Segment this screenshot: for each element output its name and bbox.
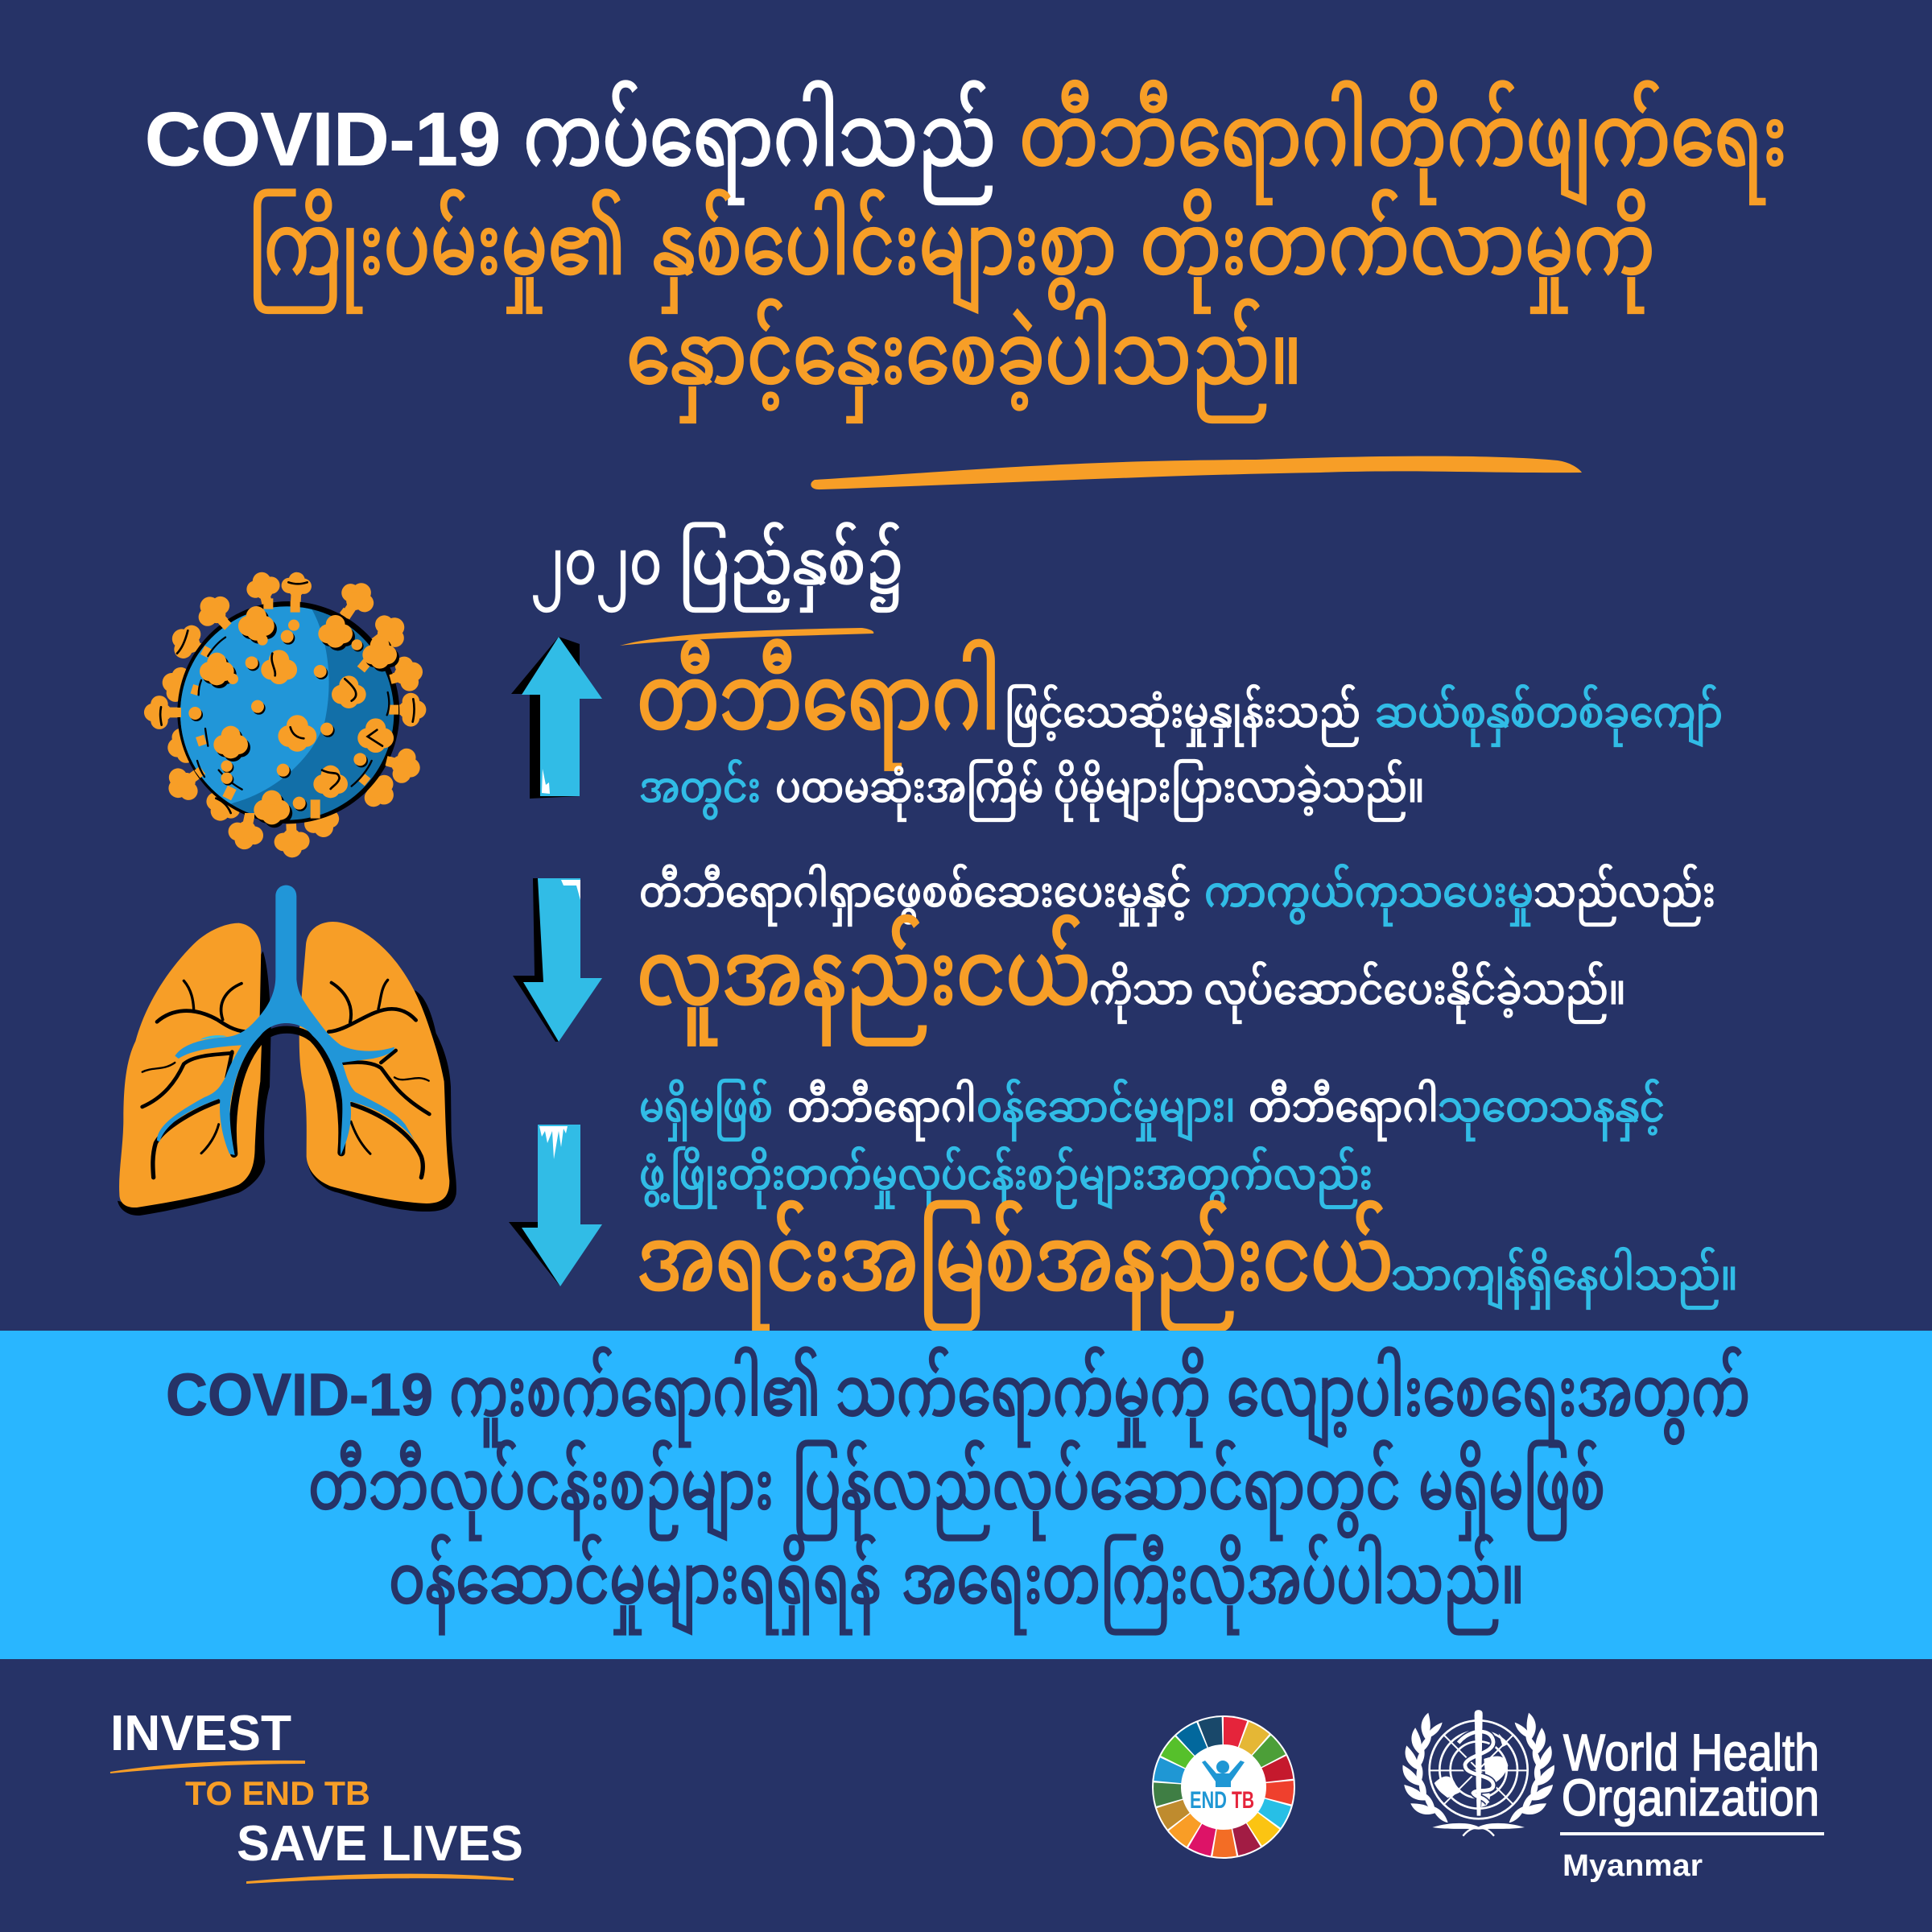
text block: few reached: တီဘီရောဂါရှာဖွေစစ်ဆေးပေးမှုနှင့် xyxy=(639,851,1191,943)
panel: call to action band: အရေးတကြီးလိုအပ်ပါသည်။ xyxy=(902,1514,1525,1662)
subheading: in 2020: ၂၀၂၀ xyxy=(531,503,662,637)
title: ကပ်ရောဂါသည် xyxy=(523,55,996,237)
panel: call to action band: COVID-19 xyxy=(166,1361,433,1428)
panel: call to action band: တီဘီလုပ်ငန်းစဉ်များ xyxy=(308,1420,774,1567)
logo: invest to end TB save lives: TO END TB xyxy=(185,1774,370,1812)
title: COVID-19 xyxy=(145,97,501,181)
title: တိုးတက်လာမှုကို xyxy=(1140,163,1655,346)
panel: call to action band: သက်ရောက်မှုကို xyxy=(836,1327,1211,1474)
text block: deaths rise: ဆယ်စုနှစ်တစ်ခုကျော် xyxy=(1375,671,1723,763)
text block: few resources: တီဘီရောဂါ xyxy=(1249,1066,1439,1158)
text block: few resources: သုတေသနနှင့် xyxy=(1438,1066,1665,1158)
arrow: down (resources) xyxy=(509,1125,602,1286)
subheading: in 2020 xyxy=(531,503,903,637)
logo text: World Health Organization Myanmar: Organization xyxy=(1562,1769,1819,1827)
panel: call to action band: ကူးစက်ရောဂါ၏ xyxy=(449,1327,821,1474)
text block: few resources: ဝန်ဆောင်မှုများ၊ xyxy=(976,1066,1236,1158)
arrow: up xyxy=(511,637,602,799)
text block: deaths rise xyxy=(637,611,1723,838)
panel: call to action band: ဝန်ဆောင်မှုများရရှိရန် xyxy=(389,1514,881,1662)
text block: few reached: သည်လည်း xyxy=(1534,851,1715,943)
arrow: down (diagnosis and treatment) xyxy=(513,878,602,1042)
title xyxy=(145,55,1787,456)
logo: End TB SDG wheel: END xyxy=(1190,1787,1227,1814)
logo: invest to end TB save lives: INVEST xyxy=(110,1706,291,1761)
icon: lungs xyxy=(118,886,456,1216)
text block: deaths rise: တီဘီရောဂါ xyxy=(637,611,1001,805)
subheading underline swoosh xyxy=(620,628,873,646)
panel: call to action band xyxy=(0,1327,1932,1662)
text block: deaths rise: ဖြင့်သေဆုံးမှုနှုန်းသည် xyxy=(1005,671,1360,763)
text block: few resources: သာကျန်ရှိနေပါသည်။ xyxy=(1391,1234,1738,1326)
title: နှောင့်နှေးစေခဲ့ပါသည်။ xyxy=(626,273,1302,456)
text block: few reached xyxy=(637,851,1715,1080)
title underline swoosh xyxy=(811,456,1582,489)
text block: few resources: မရှိမဖြစ် xyxy=(639,1066,773,1158)
logo text: World Health Organization Myanmar: Myanmar xyxy=(1563,1849,1703,1883)
text block: few resources: တီဘီရောဂါ xyxy=(787,1066,976,1158)
logo: WHO emblem xyxy=(1402,1710,1555,1836)
panel: call to action band: ပြန်လည်လုပ်ဆောင်ရာတွင် xyxy=(792,1420,1401,1567)
text block: few reached: ကာကွယ်ကုသပေးမှု xyxy=(1204,851,1534,943)
title: တီဘီရောဂါတိုက်ဖျက်ရေး xyxy=(1019,55,1787,237)
text block: deaths rise: အတွင်း xyxy=(639,746,761,838)
text block: few resources xyxy=(637,1066,1738,1366)
text block: few reached: ကိုသာ လုပ်ဆောင်ပေးနိုင်ခဲ့သည်။ xyxy=(1089,948,1626,1040)
text block: few resources: ဖွံ့ဖြိုးတိုးတက်မှုလုပ်ငန်းစဉ်များအတွက်လည်း xyxy=(639,1133,1373,1225)
logo text: World Health Organization Myanmar xyxy=(1560,1724,1824,1883)
panel: call to action band: မရှိမဖြစ် xyxy=(1418,1420,1605,1567)
text block: few resources: အရင်းအမြစ်အနည်းငယ် xyxy=(637,1172,1393,1366)
title: နှစ်ပေါင်းများစွာ xyxy=(652,163,1117,346)
subheading: in 2020: ပြည့်နှစ်၌ xyxy=(679,503,903,637)
panel: call to action band: လျော့ပါးစေရေးအတွက် xyxy=(1227,1327,1750,1474)
logo: invest to end TB save lives: SAVE LIVES xyxy=(237,1816,523,1872)
logo: invest to end TB save lives xyxy=(110,1706,523,1883)
icon: coronavirus xyxy=(144,568,427,858)
title: ကြိုးပမ်းမှု၏ xyxy=(248,163,626,346)
text block: few reached: လူအနည်းငယ် xyxy=(637,886,1091,1080)
logo: End TB SDG wheel: TB xyxy=(1232,1787,1254,1814)
text block: deaths rise: ပထမဆုံးအကြိမ် ပိုမိုများပြားလာခဲ့သည်။ xyxy=(775,746,1425,838)
logo: End TB SDG wheel xyxy=(1144,1707,1303,1867)
logo text: World Health Organization Myanmar: World Health xyxy=(1563,1724,1819,1781)
